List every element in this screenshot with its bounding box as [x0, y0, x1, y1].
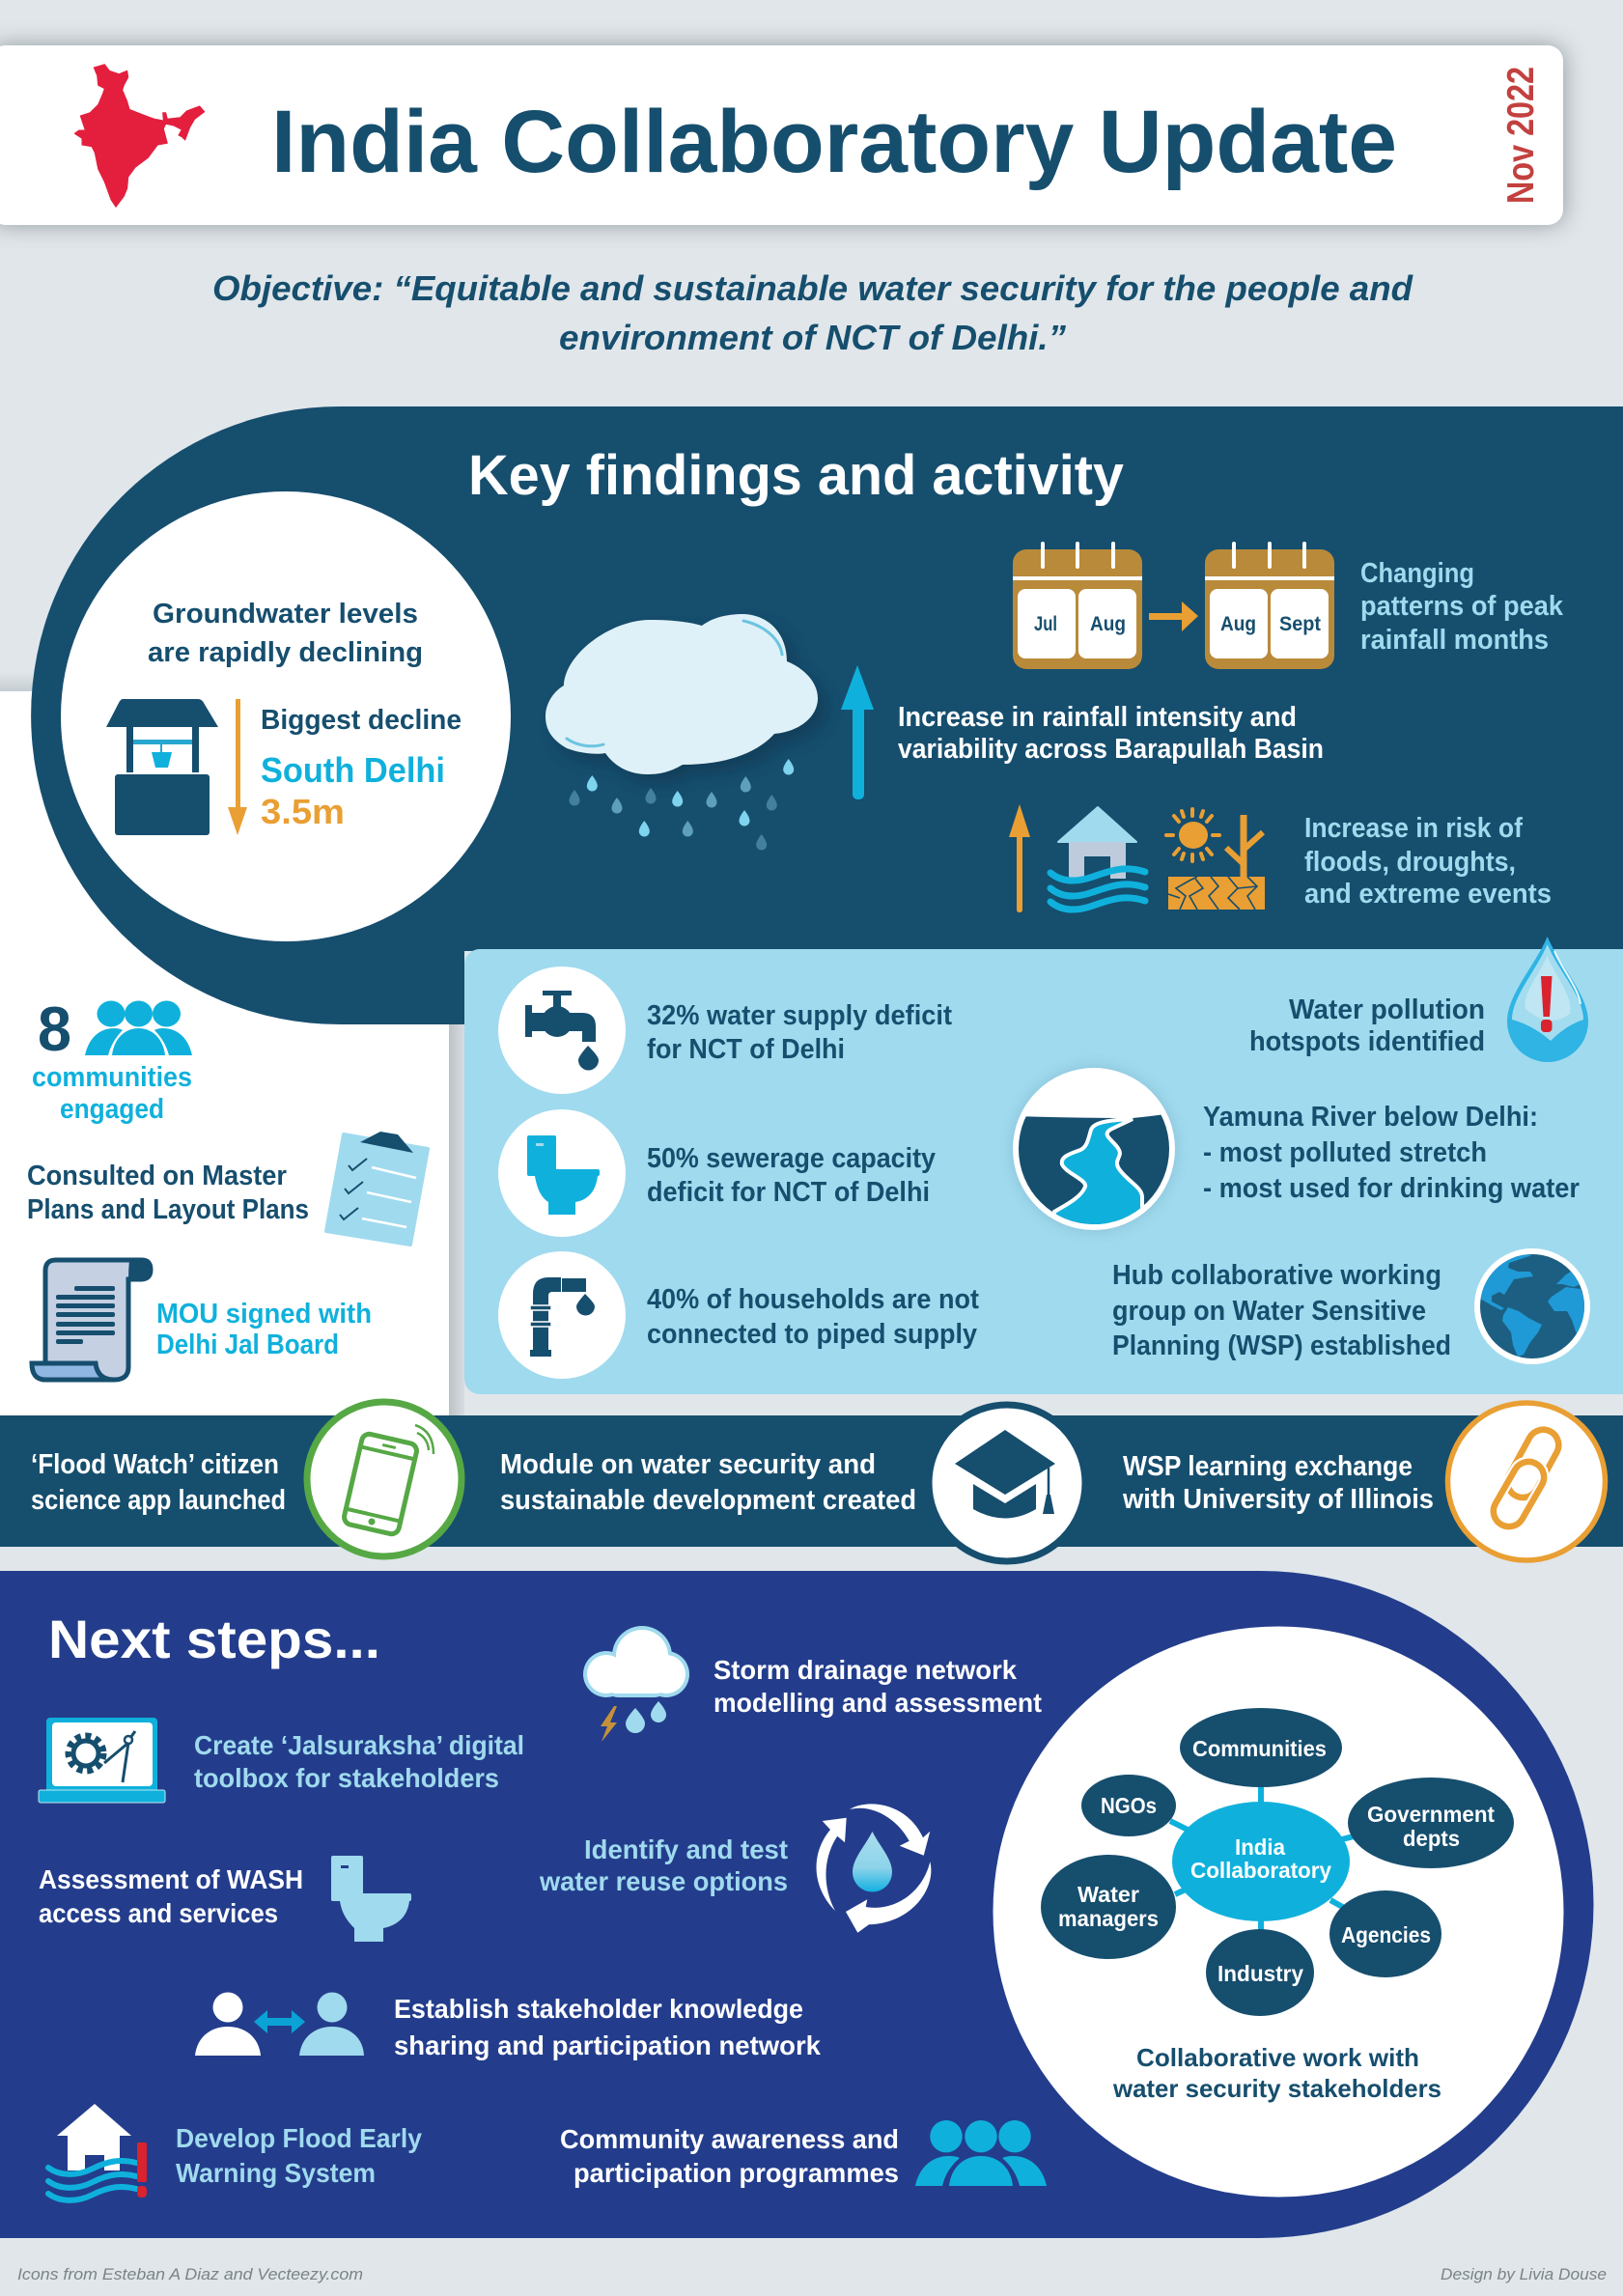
text: learning exchange	[1122, 1451, 1434, 1515]
panel: stakeholders circle	[993, 1626, 1564, 2198]
text: piped supply: connected to piped supply	[647, 1319, 977, 1350]
text: Yamuna: Yamuna River below Delhi:	[1203, 1102, 1538, 1133]
text: learning exchange: with University of Illinois	[1122, 1484, 1434, 1515]
node: India Collaboratory	[1172, 1802, 1350, 1921]
text: water supply deficit: 32% water supply deficit	[647, 1000, 952, 1031]
text: changing patterns: rainfall months	[1360, 625, 1549, 656]
icon: pipe	[498, 1251, 626, 1379]
text: community awareness: participation programmes	[574, 2158, 899, 2188]
caption: collaborative work	[1112, 2043, 1441, 2103]
text: storm drainage: Storm drainage network	[714, 1655, 1017, 1685]
text: risk of floods: and extreme events	[1304, 879, 1552, 910]
text: flood watch	[31, 1449, 286, 1516]
text: toolbox: Create ‘Jalsuraksha’ digital	[194, 1730, 524, 1760]
icon: India map	[74, 65, 205, 207]
text: MOU	[156, 1299, 372, 1360]
panel: groundwater circle	[61, 491, 511, 941]
text: water pollution: hotspots identified	[1249, 1026, 1485, 1057]
node: communities: Communities	[1192, 1736, 1327, 1761]
icon: calendar August September: Aug	[1220, 613, 1256, 635]
text: piped supply	[647, 1284, 979, 1350]
node: agencies	[1329, 1890, 1441, 1977]
node: industry	[1206, 1929, 1314, 2016]
text: water pollution	[1249, 994, 1485, 1057]
groundwater heading	[148, 599, 423, 668]
text: flood watch: ‘Flood Watch’ citizen	[31, 1449, 279, 1480]
text: hub working group: Planning (WSP) established	[1112, 1330, 1451, 1361]
text: community awareness: Community awareness and	[560, 2124, 899, 2154]
text: storm drainage: modelling and assessment	[714, 1688, 1042, 1718]
objective statement: environment of NCT of Delhi.”	[559, 318, 1066, 357]
icon: calendar July August: Aug	[1090, 613, 1126, 635]
icon: community people	[85, 1000, 192, 1055]
icon: river circle	[1013, 1068, 1178, 1236]
text: water supply deficit: for NCT of Delhi	[647, 1034, 845, 1065]
node: water managers	[1041, 1855, 1176, 1959]
icon: MOU scroll	[32, 1260, 151, 1380]
text: hub working group: group on Water Sensitive	[1112, 1296, 1426, 1327]
text: risk of floods: floods, droughts,	[1304, 847, 1516, 878]
icon: water reuse cycle	[817, 1804, 931, 1933]
icon: flooded house	[1050, 807, 1145, 910]
node: water managers: managers	[1058, 1906, 1159, 1931]
communities engaged text: communities	[32, 1062, 192, 1093]
text: storm drainage	[714, 1655, 1042, 1718]
text: sewerage: 50% sewerage capacity	[647, 1143, 936, 1174]
panel: key findings dark background	[31, 406, 1623, 1024]
node: government depts: Government	[1367, 1802, 1495, 1827]
date: Nov 2022	[1500, 67, 1542, 204]
text: consulted: Consulted on Master	[27, 1161, 287, 1191]
number 8: 8	[38, 994, 71, 1064]
text: risk of floods	[1304, 813, 1552, 910]
objective statement	[212, 268, 1413, 357]
text: hub working group: Hub collaborative working	[1112, 1260, 1441, 1291]
icon: rain cloud	[546, 614, 827, 850]
text: changing patterns: patterns of peak	[1360, 591, 1564, 622]
icon: toilet next steps	[331, 1856, 411, 1942]
caption: collaborative work: water security stakeholders	[1112, 2074, 1441, 2103]
biggest decline text: South Delhi	[261, 750, 445, 790]
node: government depts	[1348, 1778, 1514, 1868]
icon: community people next steps	[915, 2120, 1047, 2186]
text: toolbox	[194, 1730, 524, 1793]
icon: clipboard	[326, 1132, 428, 1245]
heading: next steps: Next steps...	[48, 1609, 380, 1669]
icon: water well	[106, 699, 218, 835]
icon: calendar July August: Jul	[1034, 613, 1057, 635]
icon: flood warning	[48, 2104, 147, 2200]
text: changing patterns: Changing	[1360, 558, 1474, 589]
icon: tap	[498, 966, 626, 1094]
node: government depts: depts	[1403, 1826, 1460, 1851]
text: toolbox: toolbox for stakeholders	[194, 1763, 499, 1793]
biggest decline text	[261, 705, 462, 831]
text: module: sustainable development created	[500, 1485, 916, 1516]
text: early warning: Warning System	[176, 2158, 376, 2188]
footer: design credit: Design by Livia Douse	[1441, 2265, 1607, 2283]
groundwater heading: are rapidly declining	[148, 637, 423, 668]
text: changing patterns	[1360, 558, 1564, 656]
icon: calendar August September: Sept	[1279, 613, 1321, 635]
text: rainfall intensity	[898, 702, 1324, 765]
icon: globe	[1474, 1248, 1590, 1364]
text: Yamuna: - most polluted stretch	[1203, 1137, 1487, 1168]
objective statement: Objective: “Equitable and sustainable water security for the people and	[212, 268, 1413, 308]
text: stakeholder knowledge: Establish stakeholder knowledge	[394, 1994, 803, 2024]
connectors	[1170, 1787, 1354, 1931]
text: rainfall intensity: Increase in rainfall intensity and	[898, 702, 1297, 733]
text: hub working group	[1112, 1260, 1451, 1361]
text: flood watch: science app launched	[31, 1485, 286, 1516]
icon: toilet	[498, 1109, 626, 1237]
text: early warning	[176, 2123, 422, 2188]
text: risk of floods: Increase in risk of	[1304, 813, 1523, 844]
node: water managers: Water	[1077, 1882, 1139, 1907]
caption: collaborative work: Collaborative work with	[1136, 2043, 1419, 2072]
text: WASH: Assessment of WASH	[39, 1864, 303, 1894]
heading: key findings: Key findings and activity	[468, 444, 1124, 507]
arrow: decline	[228, 699, 247, 835]
node: India Collaboratory: India	[1235, 1834, 1285, 1860]
communities engaged text: engaged	[60, 1094, 164, 1125]
text: Yamuna: - most used for drinking water	[1203, 1173, 1580, 1204]
icon: drought sun and tree	[1166, 809, 1265, 910]
text: rainfall intensity: variability across Barapullah Basin	[898, 734, 1324, 765]
text: community awareness	[560, 2124, 899, 2188]
text: stakeholder knowledge: sharing and participation network	[394, 2030, 821, 2060]
text: MOU: MOU signed with	[156, 1299, 372, 1330]
text: stakeholder knowledge	[394, 1994, 821, 2060]
icon: storm cloud	[583, 1626, 689, 1742]
text: MOU: Delhi Jal Board	[156, 1330, 339, 1360]
text: module: Module on water security and	[500, 1449, 876, 1480]
arrow: risk increase	[1009, 804, 1030, 912]
icon: graduation cap	[929, 1405, 1085, 1561]
text: Yamuna	[1203, 1102, 1580, 1204]
text: water reuse: water reuse options	[539, 1866, 788, 1896]
icon: calendar August September	[1205, 544, 1334, 669]
text: water reuse: Identify and test	[584, 1834, 788, 1864]
text: WASH: access and services	[39, 1898, 278, 1928]
icon: calendar July August	[1013, 544, 1142, 669]
node: NGOs: NGOs	[1101, 1793, 1157, 1818]
text: learning exchange: WSP learning exchange	[1123, 1451, 1413, 1482]
text: early warning: Develop Flood Early	[176, 2123, 422, 2153]
panel: water deficits and pollution	[464, 937, 1623, 1394]
biggest decline text: 3.5m	[261, 792, 345, 831]
text: consulted	[27, 1161, 309, 1225]
biggest decline text: Biggest decline	[261, 705, 462, 736]
title: India Collaboratory Update	[271, 93, 1397, 191]
panel: next steps	[0, 1571, 1593, 2238]
header banner	[0, 45, 1564, 225]
text: water pollution: Water pollution	[1289, 994, 1485, 1025]
groundwater heading: Groundwater levels	[153, 599, 418, 630]
icon: knowledge sharing people	[195, 1993, 364, 2056]
communities engaged text	[32, 1062, 192, 1125]
icon: pollution drop	[1507, 937, 1588, 1062]
text: sewerage: deficit for NCT of Delhi	[647, 1177, 930, 1208]
text: WASH	[39, 1864, 303, 1928]
footer: icon credits: Icons from Esteban A Diaz and Vecteezy.com	[17, 2265, 363, 2283]
text: piped supply: 40% of households are not	[647, 1284, 979, 1315]
icon: laptop toolbox	[39, 1718, 165, 1803]
node: communities	[1180, 1708, 1342, 1787]
text: consulted: Plans and Layout Plans	[27, 1194, 309, 1225]
node: agencies: Agencies	[1341, 1922, 1431, 1947]
text: module	[500, 1449, 916, 1516]
text: water supply deficit	[647, 1000, 952, 1065]
text: sewerage	[647, 1143, 936, 1208]
panel: left column community activity	[27, 994, 428, 1380]
node: NGOs	[1081, 1775, 1176, 1836]
arrow: calendar shift	[1149, 602, 1198, 631]
panel: achievements band	[0, 1402, 1623, 1561]
panel: left white activities background	[0, 672, 464, 1415]
text: water reuse	[539, 1834, 788, 1896]
icon: chain link	[1448, 1403, 1605, 1560]
node: industry: Industry	[1217, 1961, 1303, 1986]
icon: phone	[307, 1402, 462, 1556]
node: India Collaboratory: Collaboratory	[1190, 1858, 1331, 1883]
arrow: rainfall increase	[841, 665, 874, 799]
